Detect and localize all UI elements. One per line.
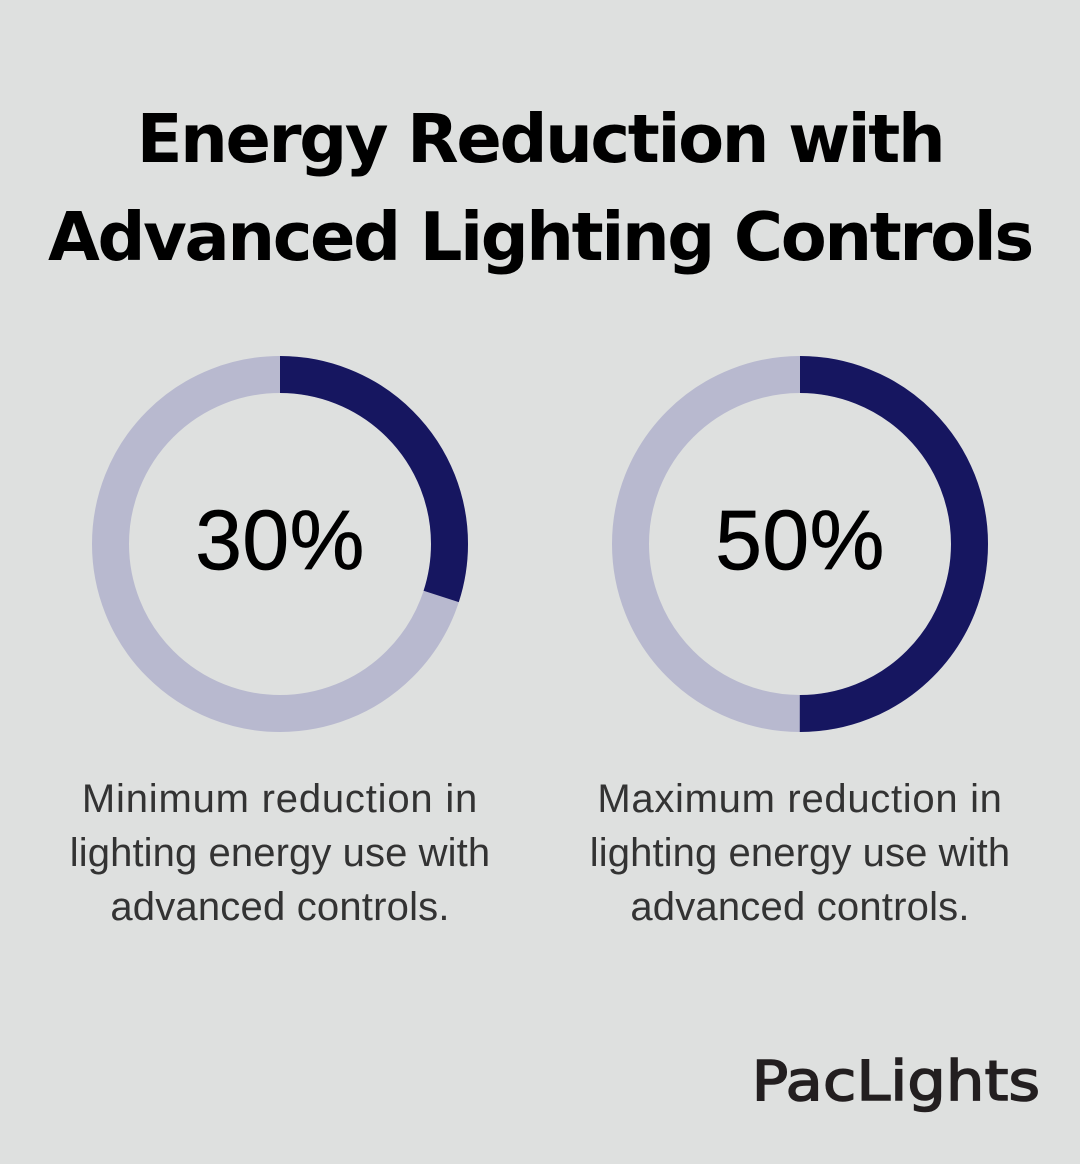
logo: PacLights: PacLights — [752, 1049, 1040, 1113]
caption: maximum reduction: Maximum reduction in — [597, 777, 1003, 821]
title — [48, 100, 1032, 276]
caption: maximum reduction: advanced controls. — [630, 885, 970, 929]
donut chart: 30% — [92, 356, 468, 732]
donut chart: 50%: 50% — [715, 493, 885, 587]
donut chart: 50% — [612, 356, 988, 732]
donut chart: 30%: 30% — [195, 493, 365, 587]
title: Advanced Lighting Controls — [48, 198, 1032, 276]
title: Energy Reduction with — [137, 100, 943, 178]
caption: maximum reduction: lighting energy use with — [590, 831, 1010, 875]
caption: maximum reduction — [590, 777, 1010, 929]
caption: minimum reduction — [70, 777, 490, 929]
caption: minimum reduction: lighting energy use with — [70, 831, 490, 875]
caption: minimum reduction: Minimum reduction in — [82, 777, 478, 821]
caption: minimum reduction: advanced controls. — [110, 885, 450, 929]
